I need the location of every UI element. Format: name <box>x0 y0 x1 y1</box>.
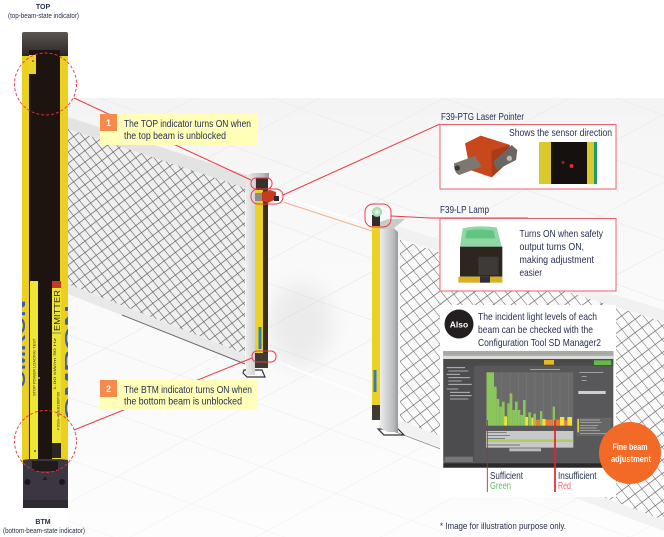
sensor housing yellow <box>22 52 68 464</box>
panel: laser pointer: Shows the sensor direction <box>509 127 612 139</box>
TOP label: TOP <box>36 4 50 11</box>
description text <box>478 311 601 349</box>
BTM label: (bottom-beam-state indicator) <box>3 528 85 535</box>
number badge 1: 1 <box>106 118 111 128</box>
blue brand marks: OMRON <box>63 305 80 420</box>
callout 1: The TOP indicator turns ON when <box>124 119 251 130</box>
callout 1: the top beam is unblocked <box>124 131 226 142</box>
callout 2 <box>100 380 258 410</box>
sufficient label: Green <box>490 481 511 492</box>
callout 2: The BTM indicator turns ON when <box>124 385 252 396</box>
heading: laser pointer: F39-PTG Laser Pointer <box>441 111 524 123</box>
sufficient label <box>490 471 523 492</box>
left fence <box>68 117 247 364</box>
enlarged sensor <box>12 32 80 508</box>
floor background <box>68 98 664 537</box>
right label strip: 1.00 kW/m 50 Hz <box>53 338 57 390</box>
panel: lamp: Turns ON when safety <box>520 228 604 240</box>
TOP label: (top-beam-state indicator) <box>8 13 79 20</box>
dashed circle: bottom indicator <box>14 410 76 472</box>
right label strip <box>52 281 62 460</box>
fine beam adjustment badge: Fine beam <box>612 442 648 452</box>
panel: SD Manager2 <box>440 305 616 497</box>
insufficient marker line <box>554 420 556 492</box>
sufficient marker line <box>486 420 488 492</box>
dashed circle: top indicator <box>14 53 76 115</box>
description text: The incident light levels of each <box>478 311 597 323</box>
number badge 2: 2 <box>106 384 111 394</box>
laser spot photo <box>539 142 597 184</box>
insufficient label <box>558 471 597 492</box>
callout 2: the bottom beam is unblocked <box>124 396 242 408</box>
bottom end cap <box>23 459 68 508</box>
description text: beam can be checked with the <box>478 324 593 336</box>
number badge 2 <box>100 380 117 397</box>
right sensor post with light curtain <box>372 207 405 435</box>
BTM label <box>3 519 85 535</box>
leader lines <box>74 98 528 430</box>
fine beam adjustment badge: adjustment <box>611 454 651 464</box>
BTM label: BTM <box>35 519 51 526</box>
panel: lamp: output turns ON, <box>520 241 584 253</box>
heading: lamp: F39-LP Lamp <box>440 204 489 216</box>
right label strip: F3SG-4RE0160P30 <box>56 391 60 430</box>
indicator highlight outlines <box>251 178 391 362</box>
laser beam <box>283 202 372 231</box>
insufficient label: Red <box>558 481 571 492</box>
panel: laser pointer <box>440 124 616 189</box>
footnote: * Image for illustration purpose only. <box>440 521 566 531</box>
left label strip: STOP POWER LOAD/NG TEST <box>32 338 36 396</box>
insufficient label: Insufficient <box>558 471 597 482</box>
laser pointer product photo <box>454 136 517 177</box>
blue brand marks: OMRON <box>12 300 29 388</box>
panel: lamp <box>440 218 616 291</box>
left label strip <box>30 281 40 459</box>
right label strip: EMITTER <box>52 290 62 331</box>
software screenshot <box>443 351 613 468</box>
sensor black window <box>29 50 60 462</box>
sufficient label: Sufficient <box>490 471 523 482</box>
description text: Configuration Tool SD Manager2 <box>478 337 601 349</box>
top indicator tab <box>29 55 36 74</box>
right fence <box>394 238 664 531</box>
callout 1 <box>100 114 258 145</box>
TOP label <box>8 4 79 20</box>
number badge 1 <box>100 114 117 131</box>
blue brand marks <box>22 302 68 418</box>
panel: lamp: easier <box>520 267 542 279</box>
left sensor post with light curtain <box>243 173 269 377</box>
also badge: Also <box>450 320 468 330</box>
also badge <box>444 310 474 338</box>
laser pointer on post <box>255 190 279 203</box>
fine beam adjustment badge <box>599 422 661 484</box>
lamp product photo <box>458 226 502 283</box>
top end cap <box>22 32 68 56</box>
panel: lamp: making adjustment <box>520 254 594 266</box>
